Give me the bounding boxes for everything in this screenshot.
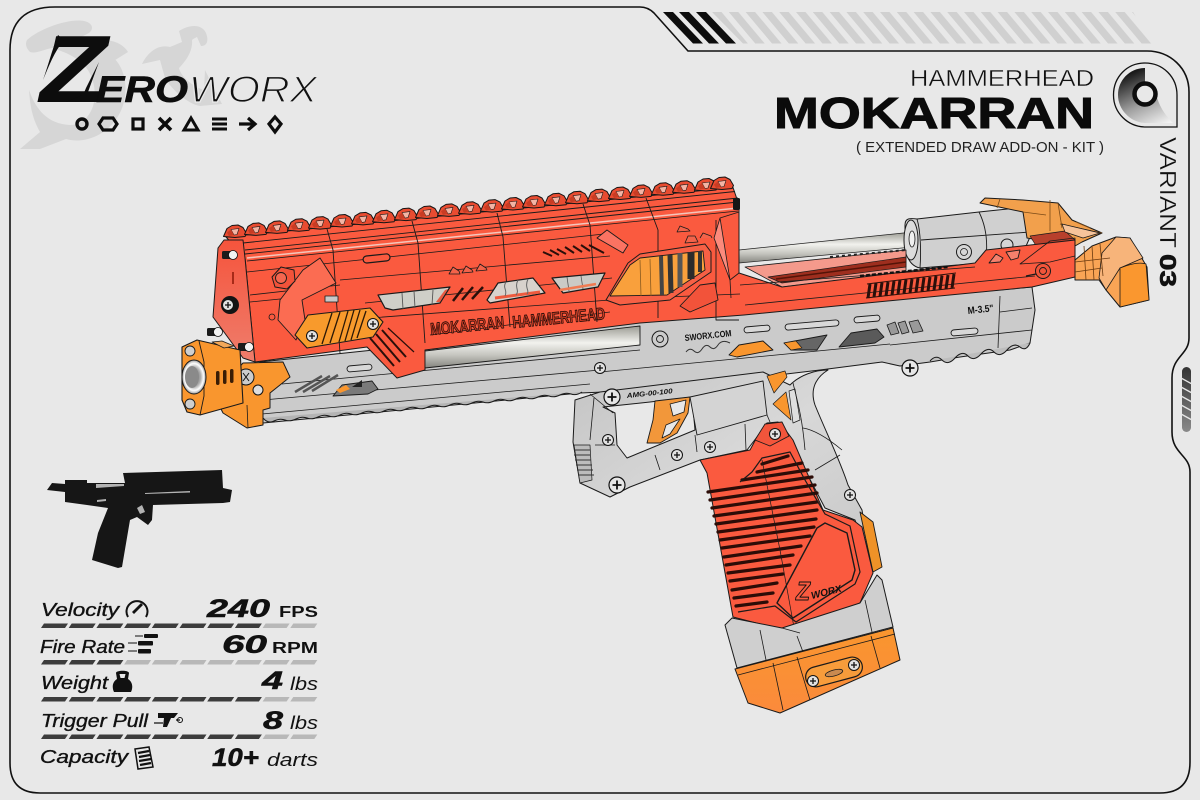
small vents near pillar	[680, 283, 718, 312]
rear black bolt	[733, 198, 740, 210]
stat: weight: Weight	[41, 673, 109, 693]
rear cylinder	[904, 207, 1030, 268]
stat: velocity: 240	[205, 595, 270, 623]
base plate slot	[803, 655, 865, 689]
stat: velocity: FPS	[279, 604, 318, 621]
right edge pill	[1181, 367, 1192, 432]
grip logo	[795, 576, 844, 606]
stat: capacity	[40, 744, 318, 772]
pale face block	[597, 230, 628, 253]
ring fastener	[652, 331, 668, 347]
lower grey rail	[247, 287, 1035, 423]
wordmark ERO: ERO	[96, 69, 188, 110]
frame markings: AMG-00-100	[625, 388, 673, 400]
rating bar	[41, 734, 317, 739]
stat: fire rate: Fire Rate	[40, 637, 125, 657]
small screw slot	[325, 296, 338, 302]
orange muzzle	[182, 340, 243, 415]
stat: fire rate: RPM	[272, 640, 318, 657]
rear ring fastener	[1026, 264, 1050, 278]
stat: weight: lbs	[290, 674, 318, 694]
stat: trigger pull: lbs	[290, 713, 318, 733]
orange rear hook	[980, 198, 1102, 252]
window 3	[552, 273, 605, 293]
notch piece stripes	[370, 330, 406, 366]
metal guide tube	[425, 326, 640, 368]
slash vents	[543, 245, 604, 256]
red main body	[213, 188, 1075, 378]
variant badge icon	[1114, 63, 1177, 127]
stat: capacity: darts	[267, 750, 318, 770]
blaster silhouette thumbnail	[47, 470, 232, 568]
stat: fire rate: 60	[222, 631, 267, 659]
orange rear charging handle	[1075, 237, 1149, 307]
panel seams	[327, 198, 739, 353]
hex boss	[272, 267, 295, 289]
rating bar	[41, 660, 317, 664]
side rack teeth	[866, 273, 956, 298]
trigger housing	[690, 381, 767, 435]
grip top lug and screw	[755, 422, 789, 446]
stat: trigger pull: 8	[263, 707, 283, 735]
product line: HAMMERHEAD	[910, 65, 1094, 91]
red main body: HAMMERHEAD	[512, 304, 606, 332]
rail longitudinal lines	[243, 192, 738, 254]
rear rod	[739, 232, 913, 263]
rail slots	[347, 315, 978, 372]
title block	[774, 65, 1104, 156]
window 2	[487, 278, 545, 303]
stat: fire rate	[40, 631, 318, 664]
variant label: 03	[1155, 254, 1181, 287]
stat: weight	[41, 667, 318, 702]
orange frame inserts	[767, 371, 787, 393]
spec stats panel	[40, 595, 318, 772]
logo: Zeroworx	[20, 16, 318, 149]
top pill slot	[363, 254, 390, 263]
logo symbol row	[77, 117, 281, 132]
top hazard stripes	[663, 12, 1152, 44]
rail teeth	[263, 392, 582, 422]
grip	[700, 422, 873, 633]
grip ribs	[708, 456, 817, 606]
orange front block	[214, 362, 290, 428]
hammerhead shark silhouettes	[20, 20, 222, 149]
lower grey rail: M-3.5"	[967, 303, 994, 317]
blaster illustration	[182, 177, 1149, 713]
stat: capacity: 10+	[212, 744, 259, 772]
window in receiver	[745, 250, 906, 287]
stat: velocity	[41, 595, 318, 628]
wordmark WORX: WORX	[189, 69, 318, 110]
icon: trigger	[154, 713, 182, 727]
body lettering: MOKARRAN	[430, 313, 505, 339]
variant label	[1155, 137, 1181, 287]
pale pillar	[714, 218, 730, 280]
window 1	[378, 287, 450, 310]
lower frame and trigger guard	[573, 360, 918, 560]
magazine base plate	[735, 628, 900, 713]
subtitle: ( EXTENDED DRAW ADD-ON - KIT )	[856, 140, 1104, 156]
lighter chevron panel	[278, 258, 336, 340]
icon: speedometer	[126, 601, 148, 617]
magazine body	[725, 575, 893, 668]
stat: trigger pull: Trigger Pull	[41, 711, 149, 731]
front face	[213, 240, 255, 362]
body fasteners	[207, 250, 254, 352]
rail cut-outs	[729, 341, 773, 357]
rear bar vents	[989, 250, 1020, 263]
stat: trigger pull	[41, 707, 318, 739]
triangle vents	[449, 226, 712, 274]
face details	[269, 314, 275, 320]
icon: kettlebell	[113, 671, 132, 692]
grip logo: Z	[795, 576, 811, 606]
rail markings: SWORX.COM	[684, 328, 732, 343]
icon: magazine	[135, 747, 153, 769]
grip panel outline	[738, 452, 860, 622]
frame screws	[602, 434, 614, 446]
rating bar	[41, 697, 317, 702]
rating bar	[41, 624, 317, 628]
product name: MOKARRAN	[774, 89, 1094, 138]
orange rear plate on grip	[860, 512, 882, 572]
trigger opening	[603, 397, 695, 458]
top rail teeth	[224, 177, 734, 238]
stat: capacity: Capacity	[40, 747, 129, 767]
orange side plate	[295, 308, 383, 348]
Z mark: Z	[37, 16, 111, 123]
trigger	[647, 397, 690, 443]
stat: velocity: Velocity	[41, 600, 120, 620]
variant label: VARIANT	[1155, 137, 1181, 248]
large orange window	[606, 244, 711, 305]
icon: darts	[128, 634, 158, 654]
grip logo: WORX	[810, 583, 844, 602]
stat: weight: 4	[260, 667, 283, 695]
